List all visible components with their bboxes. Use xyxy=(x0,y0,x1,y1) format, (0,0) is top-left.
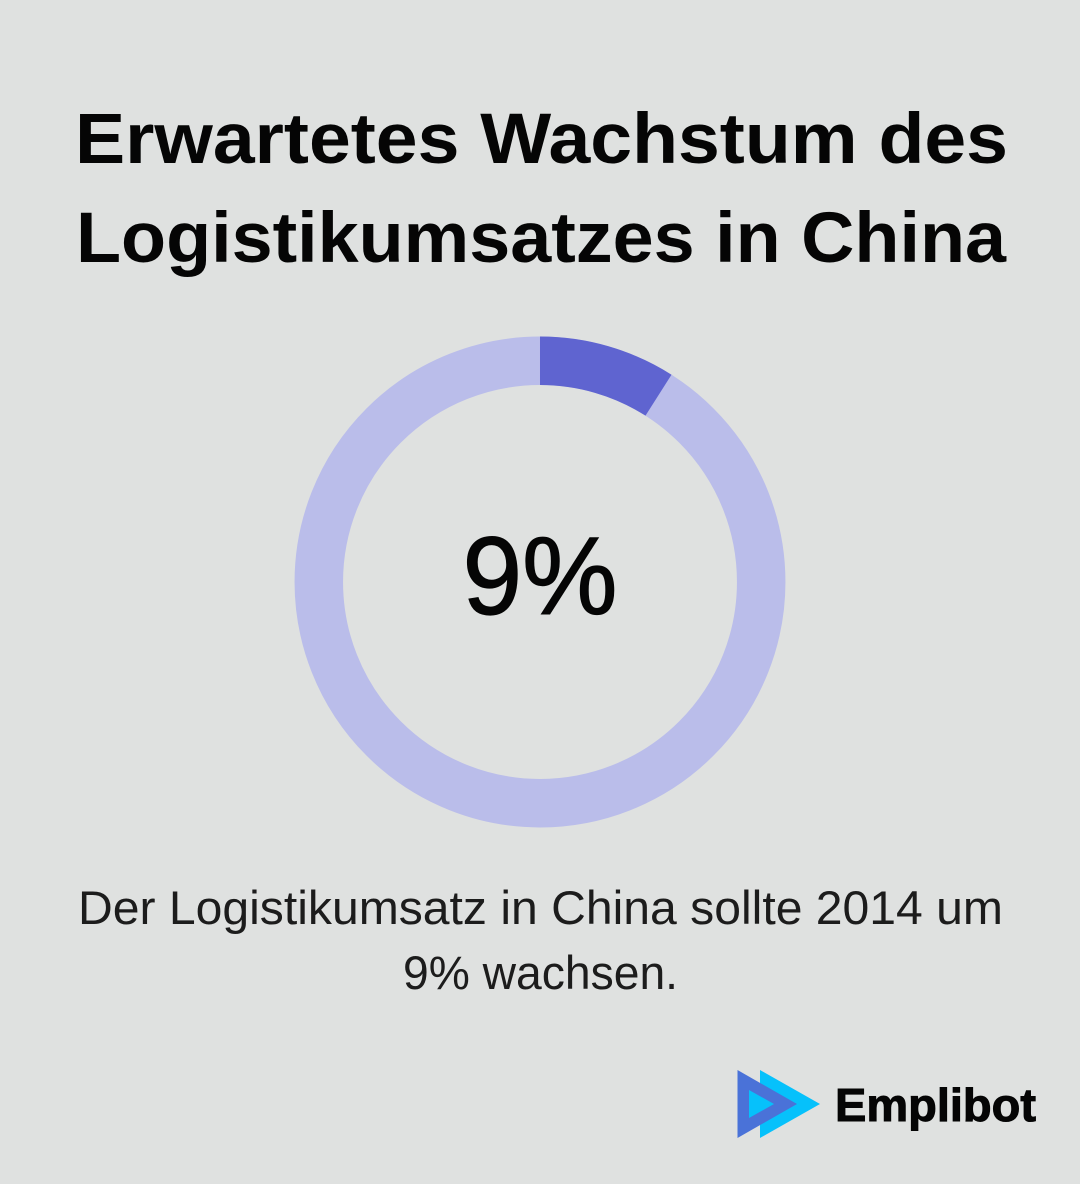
center value: 9% xyxy=(462,515,618,638)
donut track xyxy=(319,361,761,803)
donut highlighted segment: 9% xyxy=(540,361,658,395)
title xyxy=(75,100,1008,278)
description text: 9% wachsen. xyxy=(403,946,678,999)
logo: Emplibot xyxy=(738,1070,1036,1138)
description text xyxy=(78,881,1003,999)
icon: play triangles xyxy=(738,1070,820,1138)
title: Erwartetes Wachstum des xyxy=(75,100,1008,179)
title: Logistikumsatzes in China xyxy=(76,199,1007,278)
donut chart xyxy=(319,361,761,803)
logo wordmark: Emplibot xyxy=(835,1079,1036,1131)
description text: Der Logistikumsatz in China sollte 2014 um xyxy=(78,881,1003,934)
